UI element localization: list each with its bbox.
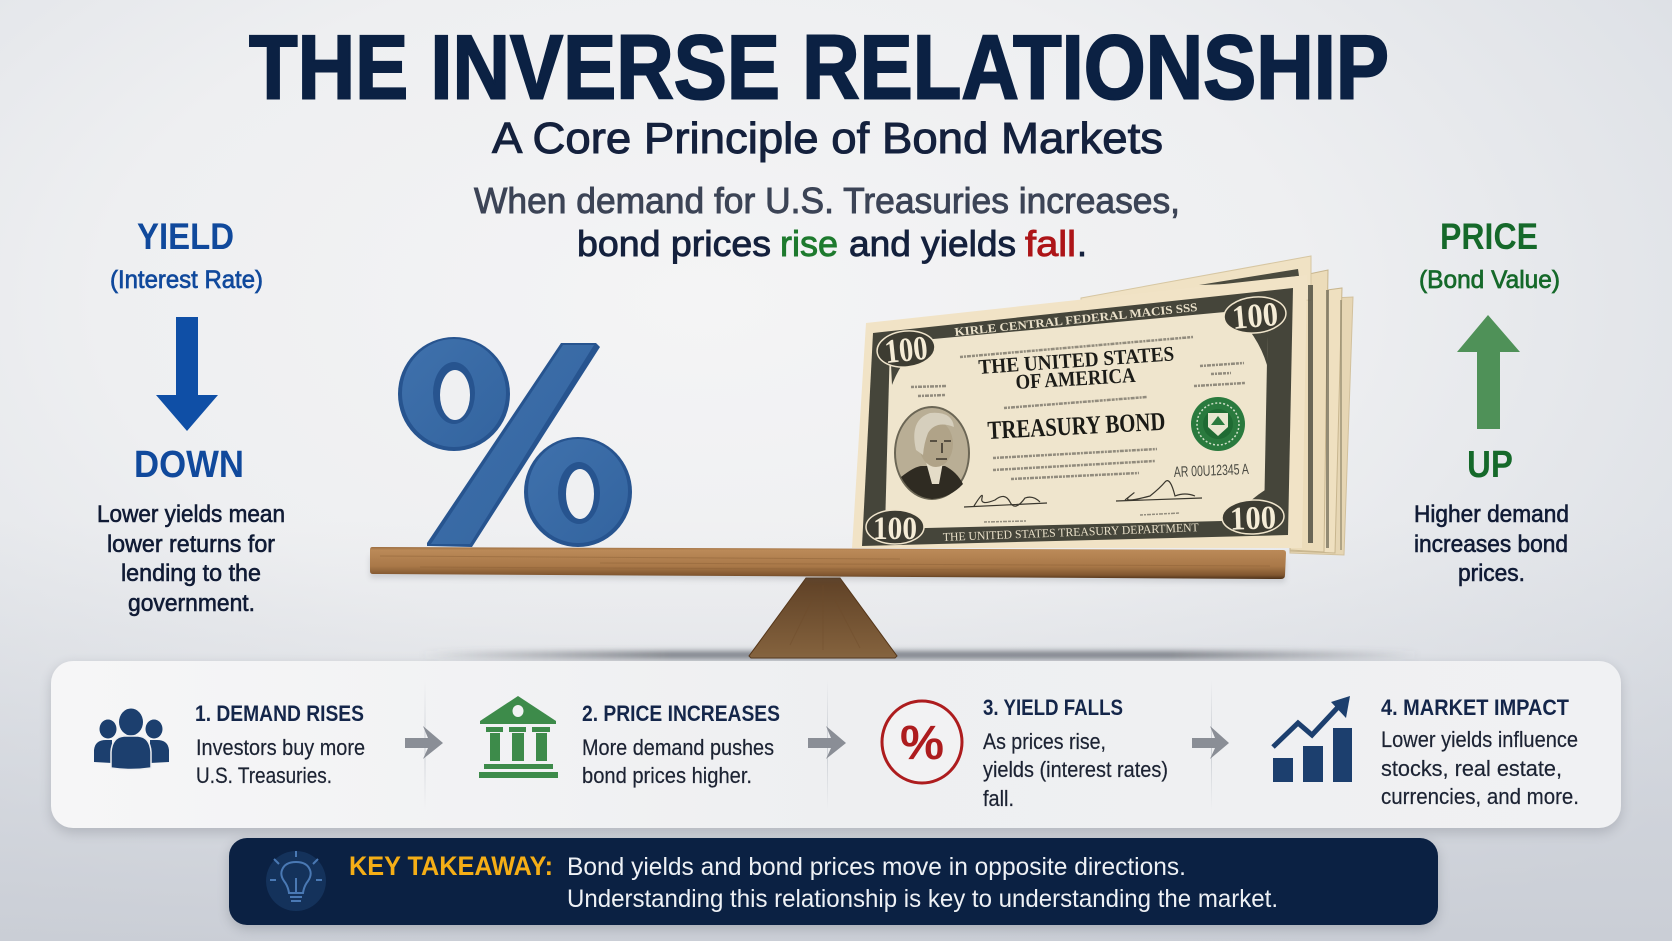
statement: demand for treasuries: bond prices (577, 223, 771, 264)
seesaw beam (370, 547, 1286, 582)
treasury seal (1191, 397, 1245, 451)
step 2 text: More demand pushes (582, 735, 774, 760)
icon: light bulb (266, 851, 326, 911)
yield heading: YIELD (137, 216, 234, 257)
step 2 text: bond prices higher. (582, 763, 752, 788)
back sheets (1081, 256, 1353, 555)
bond title: treasury bond: TREASURY BOND (987, 407, 1166, 445)
yield explanation: lending to the (121, 560, 261, 587)
price subheading: (Bond Value) (1419, 266, 1560, 294)
step 2 (479, 696, 780, 788)
step 1 heading: 1. DEMAND RISES (195, 701, 364, 726)
arrow: price up (1457, 315, 1520, 429)
bond heading: the united states: THE UNITED STATES (978, 341, 1175, 379)
step 1 text: Investors buy more (196, 735, 365, 760)
arrow: step 1 to 2 (405, 726, 443, 759)
key takeaway text: Bond yields and bond prices move in opposite directions. (567, 853, 1186, 881)
border lettering top: KIRLE CENTRAL FEDERAL MACIS SSS (954, 300, 1198, 339)
step 3 text: yields (interest rates) (983, 757, 1168, 782)
key takeaway banner (229, 838, 1438, 929)
subtitle: A Core Principle of Bond Markets (492, 114, 1163, 163)
yield explanation: Lower yields mean (97, 501, 285, 528)
step 3 (882, 695, 1168, 811)
step 1 text (196, 735, 365, 788)
icon: percent circle (882, 701, 962, 783)
stack of treasury bonds (852, 256, 1353, 555)
left column: yield (97, 216, 285, 617)
step 4 text: Lower yields influence (1381, 727, 1578, 752)
price explanation: prices. (1458, 560, 1525, 587)
statement: demand for treasuries: When demand for U.S. Treasuries increases, (474, 180, 1180, 221)
front bond sheet (852, 275, 1307, 548)
statement: demand for treasuries: fall (1025, 223, 1076, 264)
arrow: step 3 to 4 (1192, 726, 1229, 759)
arrow: step 2 to 3 (808, 726, 846, 759)
price explanation (1414, 501, 1569, 587)
process panel (51, 661, 1621, 833)
step 3 text (983, 729, 1168, 811)
signatures (964, 481, 1202, 507)
step 1 (94, 701, 365, 788)
price explanation: increases bond (1414, 531, 1568, 558)
icon: percent circle: % (900, 717, 944, 770)
step 4 text: stocks, real estate, (1381, 756, 1562, 781)
statement: demand for treasuries: rise (780, 223, 838, 264)
yield explanation: lower returns for (107, 531, 275, 558)
yield explanation: government. (128, 590, 255, 617)
yield explanation (97, 501, 285, 617)
step 2 text (582, 735, 774, 788)
icon: growth chart (1273, 696, 1352, 782)
corner value 100 top right: 100 (1231, 296, 1280, 337)
upper percent ring (398, 337, 510, 451)
banner background (229, 838, 1438, 925)
step 4 (1273, 695, 1579, 809)
seesaw fulcrum (749, 578, 897, 658)
up label: UP (1467, 444, 1513, 486)
percent slash (427, 343, 600, 547)
step 2 heading: 2. PRICE INCREASES (582, 701, 780, 726)
icon: bank (479, 696, 558, 778)
fine print lines (911, 337, 1245, 522)
key takeaway text: Understanding this relationship is key to understanding the market. (567, 885, 1278, 913)
price explanation: Higher demand (1414, 501, 1569, 528)
border lettering bottom: THE UNITED STATES TREASURY DEPARTMENT (943, 520, 1200, 544)
percent symbol (398, 337, 632, 547)
corner value 100 bottom right: 100 (1229, 500, 1277, 538)
key takeaway text (567, 853, 1278, 913)
yield subheading: (Interest Rate) (110, 266, 263, 294)
corner value 100 top left: 100 (883, 330, 929, 371)
title: THE INVERSE RELATIONSHIP (249, 18, 1389, 118)
down label: DOWN (134, 444, 244, 486)
serial number: AR 00U12345 A (1173, 461, 1249, 481)
arrow: yield down (156, 317, 218, 431)
statement: demand for treasuries: and yields (849, 223, 1016, 264)
step 3 text: fall. (983, 786, 1014, 811)
statement: demand for treasuries (474, 180, 1180, 264)
engraved border (862, 288, 1293, 546)
bond heading: of america: OF AMERICA (1015, 363, 1137, 394)
lower percent ring (524, 437, 632, 547)
step 3 heading: 3. YIELD FALLS (983, 695, 1123, 720)
right column: price (1414, 216, 1569, 587)
portrait medallion (895, 407, 969, 499)
corner value 100 bottom left: 100 (873, 511, 917, 547)
step 4 text: currencies, and more. (1381, 784, 1579, 809)
step 3 text: As prices rise, (983, 729, 1106, 754)
icon: investors (94, 708, 169, 770)
price heading: PRICE (1440, 216, 1538, 257)
key takeaway label: KEY TAKEAWAY: (349, 851, 553, 881)
step 4 heading: 4. MARKET IMPACT (1381, 695, 1570, 720)
panel background (51, 661, 1621, 828)
step 1 text: U.S. Treasuries. (196, 763, 332, 788)
ground shadow (420, 651, 1420, 659)
statement: demand for treasuries: . (1077, 223, 1087, 264)
step 4 text (1381, 727, 1579, 809)
bond inner field (885, 308, 1268, 529)
corner scrollwork (885, 308, 1268, 529)
